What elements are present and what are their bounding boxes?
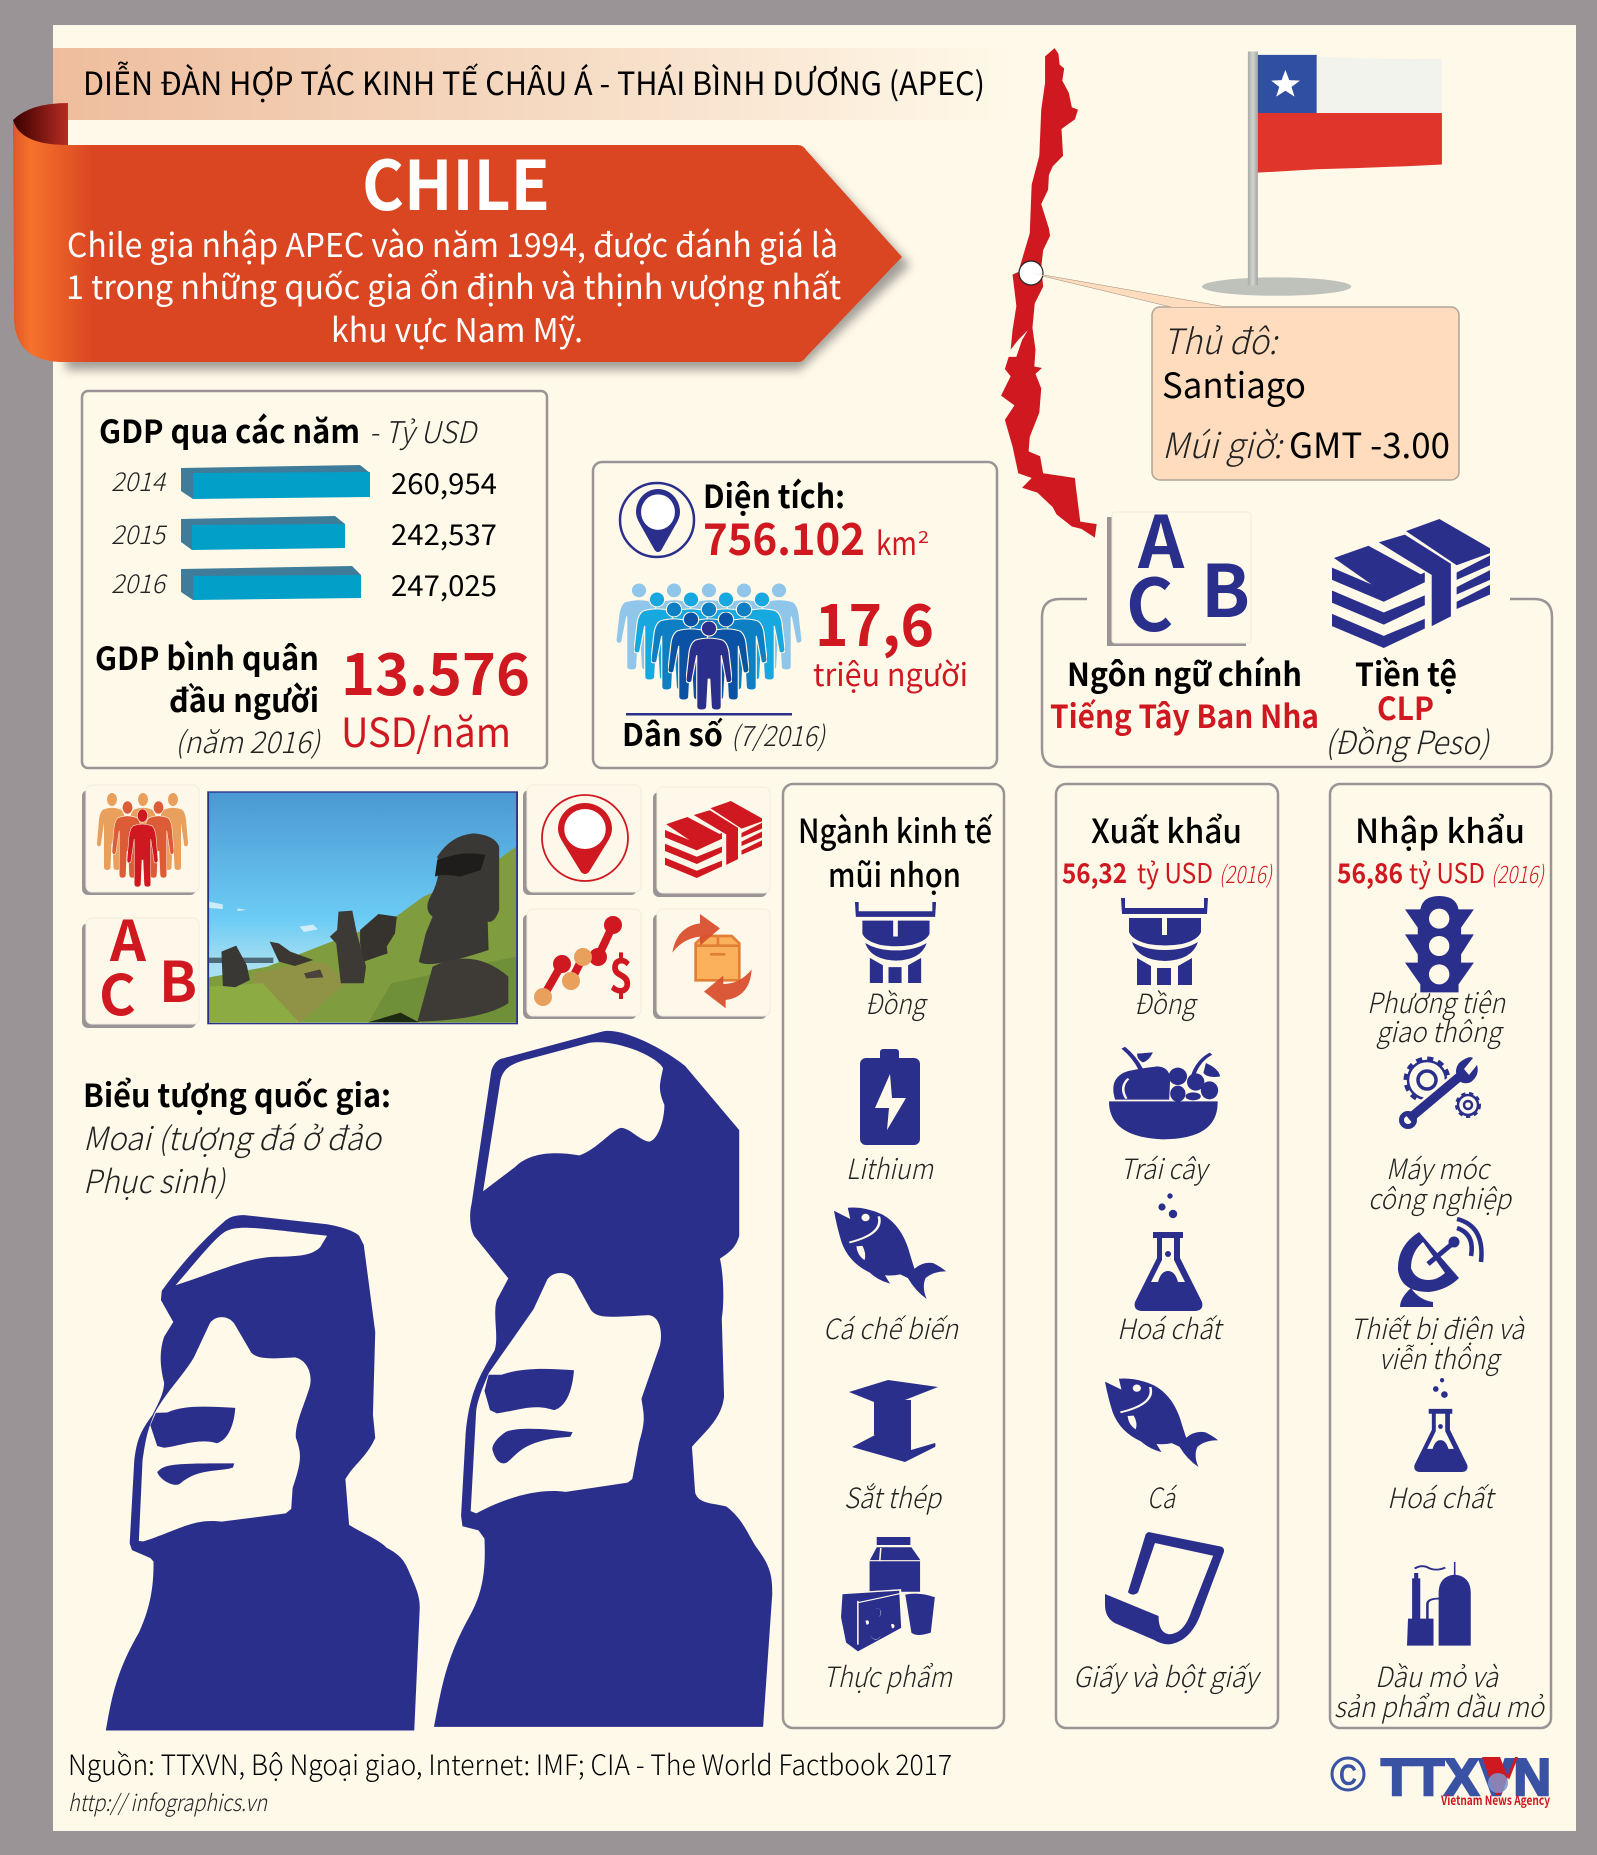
population number bbox=[813, 579, 968, 695]
export value bbox=[1062, 852, 1273, 891]
area text bbox=[703, 472, 929, 568]
item: vehicles: Phương tiện bbox=[1367, 982, 1506, 1022]
heading: national symbol: Biểu tượng quốc gia: bbox=[83, 1071, 391, 1117]
heading: exports: Xuất khẩu bbox=[1091, 805, 1242, 853]
callout: capital: Múi giờ: bbox=[1162, 418, 1284, 469]
item: lithium bbox=[846, 1049, 935, 1188]
heading: key sectors: Ngành kinh tế bbox=[798, 805, 993, 853]
top banner bbox=[53, 48, 1013, 120]
item: fruit bbox=[1109, 1048, 1220, 1188]
intro text: khu vực Nam Mỹ. bbox=[331, 304, 583, 352]
intro text: 1 trong những quốc gia ổn định và thịnh vượng nhất bbox=[66, 261, 841, 309]
import value bbox=[1337, 852, 1545, 891]
item: machinery: công nghiệp bbox=[1368, 1178, 1513, 1218]
item: oil products bbox=[1334, 1562, 1546, 1726]
logo: TTXVN: Vietnam News Agency bbox=[1440, 1790, 1550, 1809]
heading: key sectors bbox=[798, 805, 993, 897]
heading: GDP: - Tỷ USD bbox=[369, 408, 479, 452]
item: processed fish: Cá chế biến bbox=[823, 1308, 959, 1348]
item: vehicles bbox=[1367, 896, 1506, 1051]
population number: triệu người bbox=[813, 650, 968, 695]
area text: km bbox=[876, 519, 917, 565]
tile: money bbox=[653, 787, 770, 897]
currency text: Tiền tệ bbox=[1355, 650, 1457, 696]
item: oil products: Dầu mỏ và bbox=[1375, 1656, 1500, 1696]
top banner: DIỄN ĐÀN HỢP TÁC KINH TẾ CHÂU Á - THÁI BÌNH DƯƠNG (APEC) bbox=[83, 59, 985, 105]
panel: exports bbox=[1056, 784, 1278, 1728]
tile: economy chart bbox=[523, 909, 641, 1019]
item: chemicals: Hoá chất bbox=[1387, 1477, 1496, 1517]
item: steel bbox=[844, 1380, 943, 1517]
item: processed fish bbox=[823, 1208, 959, 1348]
bar chart: 242,537 bbox=[391, 512, 497, 554]
item: oil products: sản phẩm dầu mỏ bbox=[1334, 1686, 1546, 1726]
map of Chile bbox=[1001, 48, 1097, 538]
GDP per capita label: GDP bình quân bbox=[95, 634, 319, 680]
icon: people group bbox=[616, 583, 802, 710]
item: lithium: Lithium bbox=[846, 1148, 935, 1188]
item: food: Thực phẩm bbox=[823, 1656, 954, 1696]
source note bbox=[68, 1744, 952, 1818]
panel: GDP bbox=[82, 391, 547, 768]
panel: language and currency bbox=[1042, 484, 1552, 767]
tile: people bbox=[82, 785, 199, 895]
heading: key sectors: mũi nhọn bbox=[828, 849, 961, 897]
GDP per capita value bbox=[341, 628, 530, 759]
bar chart: 2015 bbox=[111, 515, 168, 552]
item: fish: Cá bbox=[1147, 1477, 1177, 1517]
item: vehicles: giao thông bbox=[1376, 1011, 1504, 1051]
import value: tỷ USD bbox=[1409, 852, 1485, 891]
item: machinery: Máy móc bbox=[1386, 1148, 1492, 1188]
icon: small Moai bbox=[106, 1215, 420, 1731]
import value: (2016) bbox=[1491, 855, 1545, 890]
currency text: (Đồng Peso) bbox=[1325, 718, 1491, 764]
title: Chile: CHILE bbox=[362, 131, 550, 230]
GDP per capita label: đầu người bbox=[169, 676, 319, 722]
currency text: CLP bbox=[1377, 684, 1434, 730]
logo: TTXVN: TTXVN bbox=[1381, 1749, 1551, 1807]
bar chart: 2014 bbox=[111, 462, 166, 499]
item: paper: Giấy và bột giấy bbox=[1073, 1656, 1262, 1696]
panel: imports bbox=[1330, 784, 1551, 1728]
bar chart: 260,954 bbox=[391, 461, 497, 503]
heading: national symbol: Phục sinh) bbox=[83, 1157, 227, 1203]
bar chart: 247,025 bbox=[391, 563, 497, 605]
photo: Moai statues on Easter Island bbox=[208, 792, 518, 1024]
tile: ABC bbox=[82, 897, 199, 1032]
item: telecom equipment: viễn thông bbox=[1379, 1338, 1502, 1378]
icon: money stack bbox=[1332, 519, 1490, 648]
tile: ABC: C bbox=[99, 951, 136, 1032]
item: fruit: Trái cây bbox=[1120, 1148, 1211, 1188]
callout: capital: Thủ đô: bbox=[1163, 314, 1279, 365]
export value: (2016) bbox=[1219, 855, 1273, 890]
area text: 2 bbox=[918, 523, 929, 548]
heading: national symbol bbox=[83, 1071, 391, 1203]
population label: Dân số bbox=[622, 710, 724, 755]
language text: Ngôn ngữ chính bbox=[1067, 650, 1302, 696]
item: copper bbox=[1121, 898, 1208, 1023]
population label bbox=[622, 710, 826, 755]
population number: 17,6 bbox=[815, 579, 934, 663]
icon: large Moai bbox=[434, 1031, 772, 1727]
panel: key sectors bbox=[783, 784, 1004, 1728]
icon: location pin bbox=[620, 483, 694, 557]
tile: ABC: B bbox=[159, 938, 197, 1019]
GDP per capita value: USD/năm bbox=[341, 701, 511, 759]
logo: TTXVN: C bbox=[1339, 1759, 1357, 1792]
item: chemicals bbox=[1117, 1193, 1224, 1348]
callout: capital: GMT -3.00 bbox=[1289, 418, 1450, 469]
icon: ABC letters: A bbox=[1137, 484, 1185, 589]
language text bbox=[1050, 650, 1319, 738]
language text: Tiếng Tây Ban Nha bbox=[1050, 692, 1319, 738]
bar chart: 2016 bbox=[111, 564, 168, 601]
item: chemicals: Hoá chất bbox=[1117, 1308, 1224, 1348]
heading: GDP: GDP qua các năm bbox=[99, 407, 360, 453]
item: steel: Sắt thép bbox=[844, 1477, 943, 1517]
panel: area and population bbox=[593, 462, 997, 768]
title ribbon bbox=[13, 103, 910, 370]
currency text bbox=[1325, 650, 1491, 764]
heading: imports: Nhập khẩu bbox=[1355, 805, 1525, 853]
item: fish bbox=[1105, 1379, 1218, 1517]
source note: http:// infographics.vn bbox=[68, 1784, 268, 1818]
item: copper: Đồng bbox=[1134, 983, 1198, 1023]
tile: ABC: A bbox=[109, 897, 147, 978]
item: machinery bbox=[1368, 1057, 1513, 1218]
item: telecom equipment bbox=[1350, 1219, 1526, 1378]
source note: Nguồn: TTXVN, Bộ Ngoại giao, Internet: IMF; CIA - The World Factbook 2017 bbox=[68, 1744, 952, 1784]
GDP per capita value: 13.576 bbox=[341, 628, 530, 712]
tile: economy chart: $ bbox=[609, 937, 633, 1007]
item: food bbox=[823, 1537, 954, 1696]
item: copper bbox=[855, 902, 936, 1023]
heading: national symbol: Moai (tượng đá ở đảo bbox=[83, 1114, 383, 1160]
icon: ABC letters: C bbox=[1126, 547, 1173, 652]
intro text bbox=[66, 219, 841, 352]
population label: (7/2016) bbox=[731, 715, 826, 755]
import value: 56,86 bbox=[1337, 852, 1403, 891]
tile: trade exchange bbox=[653, 909, 770, 1019]
item: telecom equipment: Thiết bị điện và bbox=[1350, 1308, 1526, 1348]
icon: ABC letters: B bbox=[1201, 533, 1250, 638]
item: copper: Đồng bbox=[865, 983, 928, 1023]
bar chart bbox=[111, 461, 497, 605]
intro text: Chile gia nhập APEC vào năm 1994, được đánh giá là bbox=[67, 219, 838, 267]
icon: ABC letters bbox=[1107, 484, 1251, 652]
flag of Chile bbox=[1202, 52, 1442, 296]
callout: capital bbox=[1019, 261, 1459, 480]
item: paper bbox=[1073, 1532, 1262, 1696]
export value: tỷ USD bbox=[1137, 852, 1213, 891]
GDP per capita label bbox=[95, 634, 321, 762]
export value: 56,32 bbox=[1062, 852, 1127, 891]
GDP per capita label: (năm 2016) bbox=[175, 718, 321, 762]
callout: capital: Santiago bbox=[1162, 358, 1306, 409]
tile: location bbox=[523, 785, 641, 895]
item: chemicals bbox=[1387, 1378, 1496, 1517]
area text: Diện tích: bbox=[703, 472, 845, 518]
area text: 756.102 bbox=[703, 504, 865, 568]
